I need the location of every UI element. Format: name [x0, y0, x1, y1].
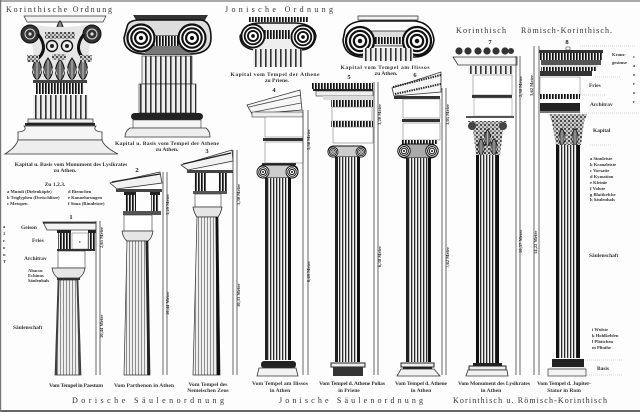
legend: Zu 1.2.3.: d Riemchen: [68, 189, 92, 194]
column 1: Temple at Paestum: 10,44 Meter: [99, 315, 104, 338]
labels: Doric parts: Geison: [21, 225, 37, 231]
caption: column 2: Vom Parthenon in Athen: [114, 383, 175, 389]
column 1: Temple at Paestum: 1: [69, 214, 73, 221]
caption: column 7: [458, 381, 531, 394]
column 6: Athena Polias, Athens: 3,05 Meter: [445, 104, 450, 125]
caption: column 1: Vom Tempel in Paestum: [49, 383, 103, 389]
labels: Doric parts: Säulenschaft: [13, 325, 43, 331]
legend: a to h: e Kleinie: [590, 180, 607, 185]
legend: a to h: c Vorsatie: [590, 168, 609, 173]
legend: a to h: d Kymation: [590, 174, 614, 179]
labels: Corinthian parts: Kapital: [593, 128, 611, 134]
caption: column 5: Vom Tempel d. Athene Polias: [319, 381, 386, 387]
caption: column 7: Vom Monument des Lysikrates: [458, 381, 531, 387]
heading: Jonische Ordnung: Jonische Ordnung: [225, 5, 333, 14]
legend: a to h: h Säulenhals: [590, 197, 615, 202]
legend: i to m: m Plinthe: [592, 345, 611, 350]
caption: Athena temple capital: zu Athen.: [156, 147, 179, 153]
Ionic capital from the temple of Athena: [124, 15, 211, 137]
labels: Corinthian parts: r: [633, 81, 635, 86]
section title: Jonische Säulenordnung: Jonische Säulenordnung: [279, 396, 423, 405]
legend: a to h: [590, 156, 616, 202]
caption: Ilissos capital: Kapital vom Tempel am Ilissos: [340, 65, 430, 71]
labels: Corinthian parts: c: [633, 54, 635, 59]
legend: Zu 1.2.3.: b Triglyphen (Dreischlitze): [7, 195, 60, 200]
column 8: Temple of Jupiter Stator: 3,62 Meter: [529, 75, 534, 96]
legend: Zu 1.2.3.: e Kannelurungen: [68, 195, 103, 200]
caption: Priene capital: Kapital vom Tempel der Athene: [230, 72, 320, 78]
labels: Corinthian parts: r: [633, 99, 635, 104]
caption: column 3: Nemeischen Zeus: [187, 388, 230, 394]
column 2: Parthenon: 2: [135, 167, 139, 174]
legend: Zu 1.2.3.: a Mutuli (Dielenköpfe): [7, 189, 52, 194]
caption: column 8: [537, 381, 591, 394]
labels: Doric parts: T: [3, 259, 6, 264]
legend: a to h: a Sinuleiste: [590, 156, 612, 161]
caption: Priene capital: zu Priene.: [265, 78, 290, 84]
caption: column 5: in Priene: [338, 388, 360, 394]
labels: Corinthian parts: a: [633, 63, 636, 68]
labels: Doric parts: o: [3, 245, 6, 250]
column 6: Athena Polias, Athens: 6: [413, 72, 417, 79]
column 1: Temple at Paestum: 2,65 Meter: [99, 227, 104, 248]
Corinthian capital from the Lysikrates monument: [5, 16, 118, 154]
labels: Corinthian parts: gesimse: [612, 60, 627, 65]
caption: column 4: Vom Tempel am Ilissos: [252, 381, 309, 387]
caption: Ilissos capital: [340, 65, 430, 77]
legend: Zu 1.2.3.: f Sima (Rinnleiste): [68, 201, 105, 206]
legend: a to h: b Kranzleiste: [590, 162, 616, 167]
column 7: Lysikrates monument: [453, 39, 523, 376]
labels: Doric parts: Säulenhals: [28, 278, 49, 283]
caption: column 8: Stator in Rom: [547, 388, 581, 394]
labels: Doric parts: r: [3, 238, 5, 243]
caption: column 5: [319, 381, 386, 394]
labels: Corinthian parts: Säulenschaft: [589, 253, 619, 259]
legend: i to m: i Wulste: [592, 327, 608, 332]
column 8: Temple of Jupiter Stator: [529, 39, 640, 376]
labels: Doric parts: Abacus: [28, 268, 43, 273]
column 8: Temple of Jupiter Stator: 8: [565, 39, 569, 46]
column 4: Ilissos temple: 3,36 Meter: [306, 129, 311, 150]
column 3: Temple of Nemean Zeus: 10,33 Meter: [236, 284, 241, 307]
legend: Zu 1.2.3.: [7, 182, 105, 206]
legend: a to h: f Volute: [590, 186, 605, 191]
heading: Römisch-Korinthisch: Römisch-Korinthisch.: [521, 26, 612, 35]
column 7: Lysikrates monument: 2,30 Meter: [518, 76, 523, 97]
caption: column 6: Vom Tempel d. Athene: [395, 381, 448, 387]
labels: Corinthian parts: o: [633, 72, 636, 77]
caption: column 6: in Athen: [411, 388, 432, 394]
column 4: Ilissos temple: 8,69 Meter: [306, 261, 311, 282]
column 5: Athena Polias, Priene: [312, 74, 382, 376]
column 8: Temple of Jupiter Stator: 14,22 Meter: [533, 231, 538, 254]
caption: column 4: [252, 381, 309, 394]
column 2: Parthenon: 10,44 Meter: [165, 292, 170, 315]
legend: i to m: k Hohlkehlen: [592, 333, 619, 338]
column 2: Parthenon: 3,29 Meter: [165, 194, 170, 215]
section title: Korinthisch u. Römisch-Korinthisch: Korinthisch u. Römisch-Korinthisch: [453, 396, 607, 405]
labels: Doric parts: Fries: [32, 238, 44, 244]
caption: Lysikrates capital: Kapital u. Basis vom Monument des Lysikrates: [15, 162, 128, 168]
column 1: Temple at Paestum: c: [79, 239, 81, 244]
column 3: Temple of Nemean Zeus: 3,30 Meter: [236, 184, 241, 205]
heading: Korinthisch: Korinthisch: [456, 26, 506, 35]
legend: Zu 1.2.3.: c Metopen: [7, 201, 28, 206]
column 6: Athena Polias, Athens: 7,62 Meter: [445, 247, 450, 268]
heading: Korinthische Ordnung: Korinthische Ordnung: [6, 5, 112, 14]
column 6: Athena Polias, Athens: [392, 72, 450, 376]
legend: Zu 1.2.3.: Zu 1.2.3.: [45, 182, 66, 188]
column 7: Lysikrates monument: 7: [488, 39, 492, 46]
caption: column 3: [187, 382, 230, 394]
labels: Doric parts: Echinus: [28, 273, 44, 278]
labels: Doric parts: a: [3, 224, 6, 229]
labels: Doric parts: 1: [3, 231, 6, 236]
column 2: Parthenon: [110, 167, 170, 375]
labels: Doric parts: u: [3, 252, 6, 257]
labels: Corinthian parts: o: [633, 90, 636, 95]
column 3: Temple of Nemean Zeus: 3: [205, 148, 209, 155]
legend: a to h: g Blattkelche: [590, 192, 616, 197]
caption: column 7: in Athen: [481, 388, 502, 394]
column 5: Athena Polias, Priene: 5: [347, 74, 351, 81]
column 4: Ilissos temple: 4: [272, 87, 276, 94]
labels: Corinthian parts: Architrav: [590, 102, 613, 108]
labels: Doric parts: Architrav: [24, 256, 47, 262]
column 5: Athena Polias, Priene: 6,38 Meter: [377, 246, 382, 267]
Ionic capital from the temple of Athena at Priene: [240, 17, 316, 67]
caption: column 6: [395, 381, 448, 394]
caption: column 8: Vom Tempel d. Jupiter-: [537, 381, 591, 387]
caption: Lysikrates capital: [15, 162, 128, 174]
legend: i to m: l Plättchen: [592, 339, 613, 344]
column 1: Temple at Paestum: [43, 214, 104, 375]
labels: Corinthian parts: Basis: [597, 366, 609, 372]
column 3: Temple of Nemean Zeus: [181, 148, 241, 375]
section title: Dorische Säulenordnung: Dorische Säulenordnung: [72, 396, 224, 405]
Ionic capital from the Ilissos temple: [343, 16, 434, 61]
caption: column 3: Vom Tempel des: [189, 382, 228, 388]
caption: Athena temple capital: [115, 141, 220, 153]
column 5: Athena Polias, Priene: 3,20 Meter: [377, 104, 382, 125]
labels: Corinthian parts: Kranz-: [612, 52, 627, 57]
legend: i to m: [592, 327, 619, 350]
caption: Ilissos capital: zu Athen.: [375, 71, 398, 77]
labels: Corinthian parts: [589, 52, 636, 372]
column 4: Ilissos temple: [247, 87, 311, 376]
column 7: Lysikrates monument: 10,57 Meter: [518, 230, 523, 253]
caption: Athena temple capital: Kapital u. Basis vom Tempel der Athene: [115, 141, 220, 147]
labels: Doric parts: [3, 224, 49, 331]
labels: Corinthian parts: Fries: [589, 83, 601, 89]
caption: Priene capital: [230, 72, 320, 84]
caption: Lysikrates capital: zu Athen.: [54, 168, 77, 174]
caption: column 4: in Athen: [270, 388, 291, 394]
